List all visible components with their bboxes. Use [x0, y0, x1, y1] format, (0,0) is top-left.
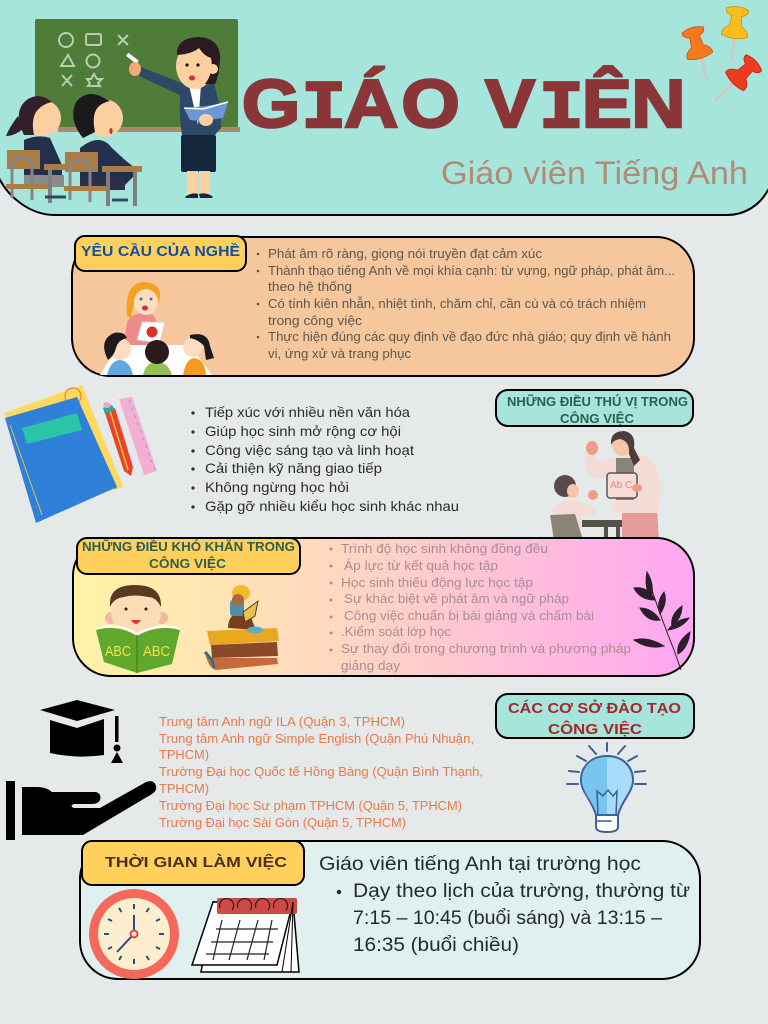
- teacher: [129, 37, 228, 198]
- benefits list: Cải thiện kỹ năng giao tiếp: [205, 460, 382, 476]
- illustration: girl reading on stack of books: [205, 585, 279, 670]
- working hours text: Giáo viên tiếng Anh tại trường học: [319, 854, 641, 875]
- students and desks: [6, 94, 142, 206]
- title: GIÁO VIÊN: [242, 65, 685, 148]
- benefits list: Không ngừng học hỏi: [205, 479, 349, 495]
- requirements list: Phát âm rõ ràng, giọng nói truyền đạt cảm xúc: [268, 247, 542, 261]
- header banner: [0, 0, 768, 215]
- difficulties list: giảng dạy: [341, 659, 401, 673]
- benefits list: Gặp gỡ nhiều kiểu học sinh khác nhau: [205, 498, 459, 514]
- label: working hours: THỜI GIAN LÀM VIỆC: [105, 853, 287, 871]
- training centres list: Trường Đại học Quốc tế Hồng Bàng (Quận Bình Thạnh,: [159, 765, 483, 779]
- illustration: boy reading ABC book: ABC: [105, 643, 131, 660]
- training centres list: TPHCM): [159, 748, 209, 762]
- benefits list: Tiếp xúc với nhiều nền văn hóa: [205, 404, 410, 420]
- benefits list: [191, 404, 459, 514]
- label: job requirements: YÊU CẦU CỦA NGHỀ: [81, 242, 240, 260]
- orange pin: [679, 24, 720, 84]
- illustration: boy reading ABC book: [96, 585, 180, 673]
- label: interesting things about the job: NHỮNG ĐIỀU THÚ VỊ TRONG: [507, 394, 688, 409]
- label: interesting things about the job: CÔNG VIỆC: [560, 411, 635, 426]
- illustration: teacher and student: [550, 431, 661, 540]
- working hours text: Dạy theo lịch của trường, thường từ: [353, 881, 690, 902]
- red pin: [705, 51, 765, 110]
- icon: light bulb: [567, 743, 646, 832]
- label: interesting things about the job: [496, 390, 693, 426]
- requirements list: Thành thạo tiếng Anh về mọi khía cạnh: từ vựng, ngữ pháp, phát âm...: [268, 264, 675, 278]
- illustration: boy reading ABC book: ABC: [143, 643, 170, 660]
- difficulties list: Công việc chuẩn bị bài giảng và chấm bài: [344, 609, 594, 623]
- label: job requirements: [75, 236, 246, 271]
- label: job difficulties: CÔNG VIỆC: [149, 556, 226, 571]
- difficulties list: [330, 542, 631, 673]
- benefits list: Giúp học sinh mở rộng cơ hội: [205, 423, 401, 439]
- requirements list: [257, 247, 675, 361]
- requirements list: Có tính kiên nhẫn, nhiệt tình, chăm chỉ, cần cù và có trách nhiệm: [268, 296, 646, 311]
- working hours text: 16:35 (buổi chiều): [353, 935, 519, 956]
- yellow pin: [718, 5, 751, 62]
- illustration: teacher and student: Ab C: [610, 480, 632, 491]
- icon: open hand: [6, 781, 156, 840]
- requirements list: theo hệ thống: [268, 280, 352, 294]
- panel: job requirements: [72, 236, 694, 376]
- label: working hours: [82, 841, 304, 885]
- benefits list: Công việc sáng tạo và linh hoạt: [205, 442, 414, 458]
- icon: clock: [89, 889, 179, 979]
- difficulties list: .Kiểm soát lớp học: [341, 625, 451, 639]
- working hours text: [319, 854, 690, 956]
- icon: notebooks, pencil and ruler: [4, 385, 157, 523]
- training centres list: TPHCM): [159, 782, 209, 796]
- training centres list: Trường Đại học Sư phạm TPHCM (Quận 5, TPHCM): [159, 799, 462, 813]
- working hours text: 7:15 – 10:45 (buổi sáng) và 13:15 –: [353, 908, 662, 929]
- subtitle: Giáo viên Tiếng Anh: [441, 155, 748, 191]
- training centres list: Trường Đại học Sài Gòn (Quận 5, TPHCM): [159, 816, 406, 830]
- label: training centres: CÔNG VIỆC: [548, 720, 643, 738]
- requirements list: vi, ứng xử và trang phục: [268, 347, 411, 361]
- training centres list: [159, 715, 483, 830]
- training centres list: Trung tâm Anh ngữ ILA (Quận 3, TPHCM): [159, 715, 405, 729]
- difficulties list: Học sinh thiếu động lực học tập: [341, 576, 533, 590]
- difficulties list: Áp lực từ kết quả học tập: [344, 558, 498, 573]
- difficulties list: Sự thay đổi trong chương trình và phương pháp: [341, 642, 631, 656]
- icon: graduation cap: [40, 700, 123, 763]
- illustration: classroom with teacher and students: [6, 19, 240, 206]
- difficulties list: Trình độ học sinh không đồng đều: [341, 542, 548, 556]
- panel: working hours: [80, 841, 700, 979]
- label: training centres: [496, 694, 694, 738]
- panel: job difficulties: [73, 538, 694, 676]
- label: training centres: CÁC CƠ SỞ ĐÀO TẠO: [508, 699, 681, 717]
- difficulties list: Sự khác biệt về phát âm và ngữ pháp: [344, 592, 569, 606]
- label: job difficulties: [77, 538, 300, 574]
- training centres list: Trung tâm Anh ngữ Simple English (Quận Phú Nhuận,: [159, 732, 474, 746]
- icon: leaf branch: [634, 572, 690, 670]
- icon: push pins: [679, 5, 765, 110]
- illustration: teacher reading with children: [100, 282, 214, 375]
- requirements list: Thực hiện đúng các quy định về đạo đức nhà giáo; quy định về hành: [268, 330, 671, 344]
- icon: wall calendar: [192, 898, 299, 972]
- requirements list: trong công việc: [268, 314, 362, 328]
- label: job difficulties: NHỮNG ĐIỀU KHÓ KHĂN TRONG: [82, 539, 295, 554]
